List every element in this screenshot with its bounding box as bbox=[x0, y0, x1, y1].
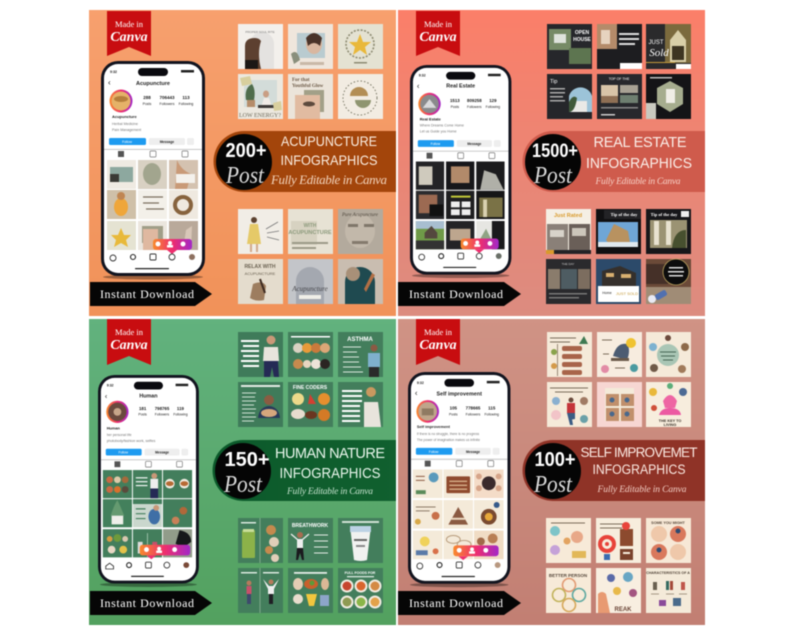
phone: self improvement instagram profile: Follow bbox=[429, 450, 439, 454]
thumbnails: bottom grid bbox=[238, 209, 383, 304]
thumbnails: bottom grid: BETTER PERSON bbox=[549, 573, 587, 578]
banner: self improvemet infographics: Post bbox=[533, 472, 573, 498]
phone: self improvement instagram profile: Self improvement bbox=[417, 424, 451, 429]
instant download arrow: Instant Download bbox=[100, 287, 194, 301]
phone: acupuncture instagram profile: Acupuncture bbox=[112, 114, 137, 119]
post grid bbox=[416, 162, 505, 249]
thumbnails: top grid: TOP OF THE bbox=[609, 77, 630, 81]
phone: real estate instagram profile: 9:32 bbox=[419, 74, 426, 78]
phone: acupuncture instagram profile: 113 bbox=[182, 95, 190, 100]
thumbnails: bottom grid: ACUPUNCTURE bbox=[288, 230, 332, 236]
phone: self improvement instagram profile: 105 bbox=[450, 405, 458, 410]
phone: real estate instagram profile: Let us Guide you Home bbox=[420, 129, 457, 133]
ribbon: made in canva bbox=[416, 11, 460, 56]
phone: human nature instagram profile: her personal life bbox=[107, 433, 132, 437]
banner: self improvemet infographics: INFOGRAPHICS bbox=[592, 462, 686, 477]
thumbnails: bottom grid: Tip of the day bbox=[611, 212, 638, 217]
banner: acupuncture infographics: Post bbox=[225, 163, 265, 189]
ribbon: made in canva: Made in bbox=[424, 327, 453, 337]
thumbnails: top grid: FINE CODERS bbox=[293, 385, 328, 391]
ribbon: made in canva: Made in bbox=[424, 19, 453, 29]
thumbnails: bottom grid: REAK bbox=[614, 607, 632, 613]
phone: real estate instagram profile: Followers bbox=[467, 105, 482, 109]
phone: real estate instagram profile: Posts bbox=[451, 105, 459, 109]
phone: self improvement instagram profile bbox=[408, 372, 510, 587]
phone: real estate instagram profile: ‹ bbox=[417, 81, 420, 90]
thumbnails: bottom grid: ACUPUNCTURE bbox=[245, 271, 276, 276]
instant download arrow bbox=[90, 282, 212, 306]
phone: human nature instagram profile: photobody/fashion work, selfies bbox=[107, 439, 156, 443]
phone: acupuncture instagram profile: Message bbox=[160, 140, 174, 144]
phone: self improvement instagram profile: Self improvement bbox=[437, 392, 482, 398]
thumbnails: bottom grid: JUST SOLD bbox=[616, 291, 638, 296]
instant download arrow: Instant Download bbox=[100, 596, 194, 610]
instant download arrow: Instant Download bbox=[409, 596, 503, 610]
banner: acupuncture infographics: INFOGRAPHICS bbox=[280, 152, 378, 168]
ribbon: made in canva bbox=[416, 319, 460, 365]
phone: self improvement instagram profile: Posts bbox=[449, 412, 458, 416]
phone: human nature instagram profile: Human bbox=[107, 425, 120, 430]
phone: self improvement instagram profile: If there is no struggle, there is no progress bbox=[417, 432, 480, 436]
banner: acupuncture infographics: ACUPUNCTURE bbox=[281, 133, 377, 149]
phone: real estate instagram profile: 809258 bbox=[467, 98, 482, 103]
phone: real estate instagram profile: 1513 bbox=[450, 98, 460, 103]
notification badge bbox=[153, 239, 192, 254]
thumbnails: top grid: LOW ENERGY? bbox=[239, 113, 281, 119]
banner: real estate infographics: 1500+ bbox=[532, 141, 578, 162]
instant download arrow bbox=[90, 591, 212, 615]
ribbon: made in canva: Canva bbox=[110, 338, 148, 353]
thumbnails: bottom grid: Just Rated bbox=[554, 213, 582, 219]
banner: acupuncture infographics bbox=[213, 131, 396, 192]
banner: real estate infographics bbox=[522, 131, 705, 192]
post grid bbox=[107, 160, 198, 250]
thumbnails: top grid: LIVING bbox=[664, 423, 676, 427]
phone: acupuncture instagram profile: 706443 bbox=[159, 95, 175, 100]
phone: real estate instagram profile: Where Dreams Come Home bbox=[420, 123, 464, 127]
banner: human nature infographics: INFOGRAPHICS bbox=[280, 466, 380, 482]
thumbnails: top grid: HOUSE bbox=[573, 37, 592, 43]
phone: real estate instagram profile: Follow bbox=[431, 142, 441, 146]
thumbnails: top grid: OPEN bbox=[575, 30, 589, 36]
phone: self improvement instagram profile: Following bbox=[484, 412, 499, 416]
instant download arrow bbox=[398, 282, 521, 306]
phone: real estate instagram profile: Real Estate bbox=[446, 83, 475, 89]
phone: human nature instagram profile: Following bbox=[173, 413, 188, 417]
thumbnails: top grid: Sold bbox=[649, 47, 669, 59]
thumbnails: top grid bbox=[238, 332, 383, 427]
phone: acupuncture instagram profile: Acupuncture bbox=[136, 81, 170, 87]
instant download arrow: Instant Download bbox=[409, 287, 503, 301]
banner: human nature infographics: HUMAN NATURE bbox=[275, 446, 385, 462]
phone: self improvement instagram profile: ‹ bbox=[415, 389, 418, 398]
thumbnails: bottom grid: FULL FOODS FOR bbox=[345, 571, 376, 575]
phone: self improvement instagram profile: 778665 bbox=[466, 405, 481, 410]
thumbnails: top grid: JUST bbox=[648, 40, 664, 46]
thumbnails: bottom grid: SOME YOU MIGHT bbox=[651, 521, 686, 525]
notification badge bbox=[140, 545, 190, 559]
ribbon: made in canva bbox=[107, 11, 151, 56]
phone: acupuncture instagram profile: Pain Management bbox=[112, 128, 141, 132]
panel: real estate bbox=[398, 10, 705, 316]
phone: acupuncture instagram profile bbox=[101, 61, 205, 280]
banner: human nature infographics bbox=[212, 440, 396, 501]
thumbnails: bottom grid: CHARACTERISTICS OF A bbox=[646, 571, 690, 575]
banner: human nature infographics: 150+ bbox=[224, 449, 270, 471]
thumbnails: top grid: THE KEY TO bbox=[659, 419, 681, 423]
phone: acupuncture instagram profile: Herbal Medicine bbox=[112, 122, 138, 126]
banner: self improvemet infographics: SELF IMPROVEMET bbox=[580, 445, 698, 460]
banner: acupuncture infographics: 200+ bbox=[226, 140, 266, 162]
post grid bbox=[413, 470, 504, 559]
thumbnails: bottom grid bbox=[238, 518, 383, 613]
banner: real estate infographics: Post bbox=[533, 163, 573, 189]
banner: real estate infographics: Fully Editable in Canva bbox=[594, 177, 681, 187]
phone: human nature instagram profile: Followers bbox=[155, 413, 170, 417]
phone: human nature instagram profile: 181 bbox=[139, 406, 147, 411]
panel: human nature bbox=[89, 319, 396, 625]
thumbnails: top grid: Tip bbox=[550, 79, 557, 85]
thumbnails: bottom grid bbox=[546, 209, 691, 304]
phone: human nature instagram profile: Follow bbox=[118, 451, 129, 455]
thumbnails: bottom grid: Pure Acupuncture bbox=[341, 213, 379, 218]
thumbnails: bottom grid: RELAX WITH bbox=[244, 264, 276, 270]
instant download arrow bbox=[398, 591, 521, 615]
phone: human nature instagram profile bbox=[98, 375, 199, 587]
banner: human nature infographics: Fully Editable in Canva bbox=[286, 487, 373, 497]
thumbnails: top grid: For that bbox=[292, 78, 310, 83]
thumbnails: top grid bbox=[547, 24, 691, 119]
panel: acupuncture bbox=[89, 10, 396, 316]
phone: human nature instagram profile: Message bbox=[155, 451, 169, 455]
ribbon: made in canva: Canva bbox=[419, 30, 457, 45]
banner: self improvemet infographics bbox=[522, 440, 705, 501]
thumbnails: bottom grid: Acupuncture bbox=[291, 285, 328, 293]
phone: self improvement instagram profile: 9:32 bbox=[417, 381, 424, 385]
phone: acupuncture instagram profile: 288 bbox=[143, 95, 151, 100]
phone: human nature instagram profile: Posts bbox=[138, 413, 147, 417]
phone: human nature instagram profile: ‹ bbox=[105, 391, 108, 400]
phone: human nature instagram profile: Human bbox=[139, 393, 157, 399]
phone: human nature instagram profile: 798765 bbox=[155, 406, 170, 411]
phone: real estate instagram profile bbox=[410, 65, 511, 278]
phone: human nature instagram profile: 9:32 bbox=[107, 384, 114, 388]
thumbnails: bottom grid: WITH bbox=[304, 223, 317, 229]
thumbnails: bottom grid: BREATHWORK bbox=[292, 523, 329, 529]
ribbon: made in canva: Made in bbox=[115, 327, 144, 337]
phone: acupuncture instagram profile: Following bbox=[179, 102, 193, 106]
phone: real estate instagram profile: Message bbox=[467, 142, 481, 146]
banner: self improvemet infographics: Fully Editable in Canva bbox=[596, 485, 687, 495]
phone: self improvement instagram profile: 115 bbox=[488, 405, 496, 410]
thumbnails: top grid bbox=[547, 332, 691, 427]
phone: human nature instagram profile: 119 bbox=[177, 406, 185, 411]
banner: real estate infographics: INFOGRAPHICS bbox=[586, 156, 692, 172]
notification badge bbox=[453, 545, 499, 560]
ribbon: made in canva: Made in bbox=[115, 19, 144, 29]
phone: acupuncture instagram profile: Followers bbox=[160, 102, 175, 106]
ribbon: made in canva: Canva bbox=[110, 30, 148, 45]
phone: real estate instagram profile: Real Estate bbox=[420, 117, 442, 122]
phone: acupuncture instagram profile: 9:32 bbox=[110, 70, 117, 74]
thumbnails: bottom grid: THE DAY bbox=[562, 262, 574, 266]
thumbnails: top grid: PROPER SOUL RITE bbox=[245, 30, 275, 34]
thumbnails: bottom grid: Tip of the day bbox=[651, 212, 678, 217]
phone: acupuncture instagram profile: Posts bbox=[143, 102, 152, 106]
phone: self improvement instagram profile: The power of imagination makes us infinite bbox=[417, 438, 480, 442]
phone: real estate instagram profile: Following bbox=[486, 105, 500, 109]
notification badge bbox=[461, 239, 499, 253]
thumbnails: bottom grid bbox=[546, 518, 691, 613]
phone: real estate instagram profile: 129 bbox=[489, 98, 497, 103]
thumbnails: top grid: Youthful Glow bbox=[292, 84, 324, 89]
phone: self improvement instagram profile: Followers bbox=[466, 412, 481, 416]
banner: real estate infographics: REAL ESTATE bbox=[594, 135, 687, 151]
phone: self improvement instagram profile: Message bbox=[466, 450, 480, 454]
banner: self improvemet infographics: 100+ bbox=[534, 449, 576, 471]
panel: self improvement bbox=[398, 319, 705, 625]
ribbon: made in canva bbox=[107, 319, 151, 365]
thumbnails: top grid bbox=[238, 24, 383, 119]
thumbnails: bottom grid: Home bbox=[602, 291, 612, 295]
ribbon: made in canva: Canva bbox=[419, 338, 457, 353]
thumbnails: top grid: ASTHMA bbox=[347, 337, 373, 343]
phone: acupuncture instagram profile: ‹ bbox=[108, 78, 111, 87]
phone: acupuncture instagram profile: Follow bbox=[122, 140, 132, 144]
banner: acupuncture infographics: Fully Editable in Canva bbox=[270, 172, 388, 187]
post grid bbox=[103, 470, 192, 557]
banner: human nature infographics: Post bbox=[223, 472, 263, 498]
